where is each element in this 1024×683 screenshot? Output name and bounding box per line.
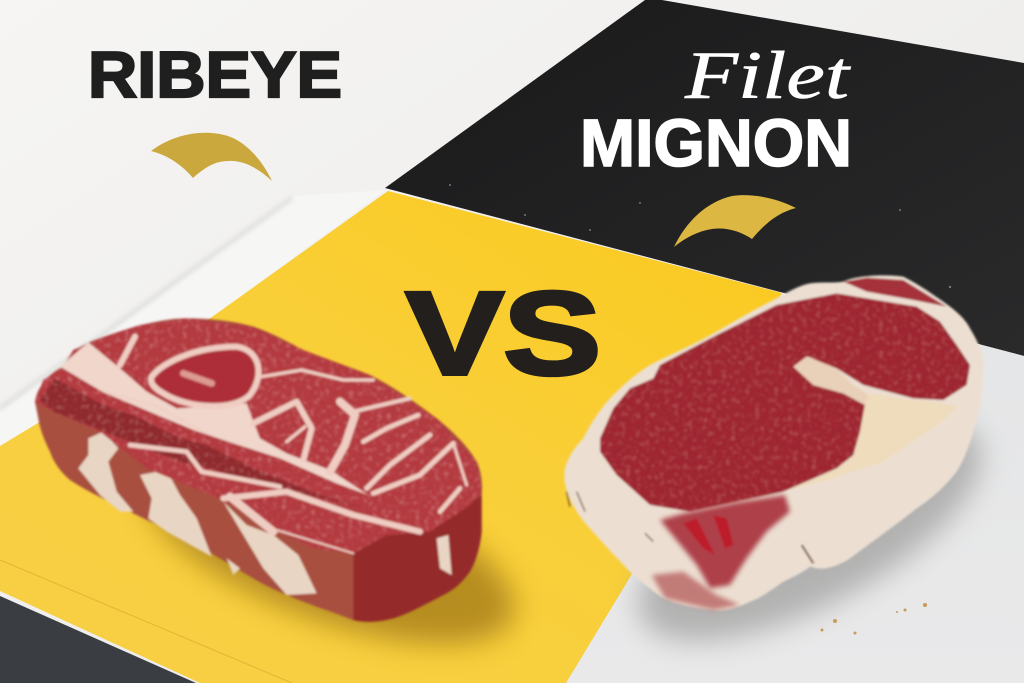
ribeye marbling lines: [103, 337, 467, 553]
icon: gold arc left: [151, 133, 272, 181]
filet small marks: [567, 492, 653, 542]
white board bottom right: [558, 292, 1024, 683]
ribeye main fat band: [60, 342, 368, 495]
filet grain: [601, 294, 966, 509]
shadow under ribeye: [123, 418, 537, 682]
filet crack: [802, 545, 813, 563]
white cutting board left: [0, 190, 385, 446]
shadow under filet: [607, 375, 1013, 683]
yellow board fold line: [0, 560, 292, 683]
vs label: VS: [406, 268, 601, 400]
title: filet: Filet: [684, 37, 852, 113]
dark slate bottom left: [0, 596, 196, 683]
filet fat wedge: [785, 393, 958, 492]
ribeye grain: [36, 318, 480, 551]
crumbs: [820, 603, 927, 634]
slate specks: [449, 184, 951, 288]
title: mignon: MIGNON: [580, 106, 852, 181]
black slate panel: [385, 0, 1024, 356]
white board ridge: [0, 198, 292, 408]
ribeye side fat patches: [78, 432, 452, 595]
filet fat seam: [793, 357, 868, 405]
filet lower meat: [652, 572, 740, 610]
filet red top: [600, 293, 970, 512]
filet bright red strip: [683, 515, 733, 555]
ribeye eye muscle: [151, 347, 259, 406]
ribeye body: [35, 318, 482, 622]
title: ribeye: RIBEYE: [88, 38, 342, 111]
ribeye side darker base: [353, 495, 482, 622]
filet top lobe: [843, 278, 947, 307]
icon: gold arc right: [674, 195, 796, 247]
filet steak: [562, 274, 984, 612]
ribeye dark lower slab: [40, 378, 367, 508]
yellow board: [0, 191, 782, 683]
filet side meat patch: [660, 495, 790, 588]
ribeye steak: [33, 316, 484, 624]
filet fat body: [564, 275, 984, 610]
ribeye top face: [35, 318, 482, 553]
